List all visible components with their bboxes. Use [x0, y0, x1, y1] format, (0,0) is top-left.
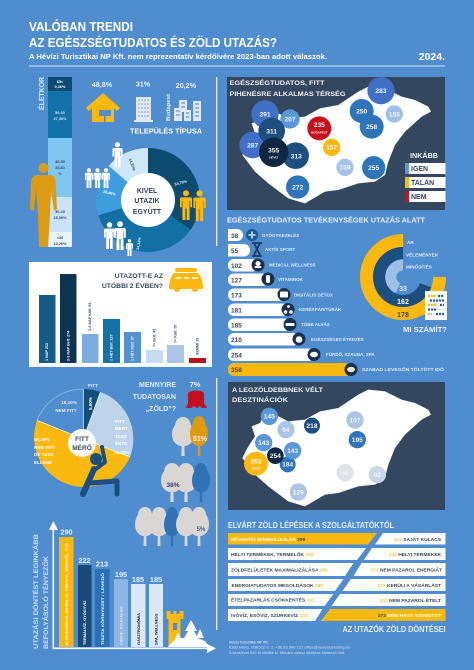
heading: ELVÁRT ZÖLD LÉPÉSEK A SZOLGÁLTATÓKTÓL	[228, 521, 394, 530]
map and bubbles: 283	[375, 88, 387, 95]
bars: 127	[231, 278, 242, 284]
bars: 185	[150, 575, 162, 584]
bars	[59, 528, 163, 647]
centre label: MÉRŐ	[72, 443, 92, 452]
map and bubbles: 143	[287, 448, 299, 455]
heading: TUDATOSAN	[133, 394, 176, 401]
age stacked bar: 15,00%	[54, 216, 67, 220]
bars	[228, 229, 351, 376]
labels: EGÉSZSÉGES ÉTKEZÉS	[311, 335, 364, 342]
heading	[230, 78, 346, 98]
heading: „ZÖLD”?	[146, 404, 176, 413]
icon: abacus	[425, 291, 447, 320]
percent labels	[92, 80, 197, 90]
map and bubbles: HÉVÍZ	[269, 154, 278, 159]
centre label	[121, 173, 175, 227]
bars: 290	[60, 528, 73, 536]
icon: van	[169, 268, 203, 292]
bars: 2-3 NAP Külf. 81	[88, 303, 92, 331]
labels: TÖBB ALVÁS	[301, 321, 330, 327]
labels: MEDICAL WELLNESS	[269, 262, 316, 268]
year: 2024.	[419, 51, 445, 63]
percent 7: 7%	[190, 380, 201, 389]
age stacked bar: 40-50	[55, 160, 65, 164]
bars: 173	[231, 292, 242, 300]
pie chart: fitness: 25,20%	[114, 450, 130, 455]
labels: DIGITÁLIS DETOX	[294, 292, 333, 298]
left rows: MŰANYAG MINIMALIZÁLÁS 309	[231, 536, 306, 543]
age stacked bar: 33,80	[55, 166, 65, 170]
radial chart: what matters: 33	[399, 286, 407, 293]
bars: 1 NAP 213	[45, 343, 49, 361]
heading	[102, 273, 163, 290]
donut chart: travel companions	[85, 142, 206, 256]
trees 5 percent	[135, 507, 209, 546]
pie chart: fitness: NEM FITT	[55, 408, 77, 413]
percent labels: 20,2%	[176, 81, 197, 90]
left rows: ZÖLDFELÜLETEK MAXIMALIZÁLÁSA 285	[231, 566, 328, 574]
age heading: ÉLETKOR	[37, 77, 46, 110]
left rows: IVÓVÍZ, ESŐVÍZ, SZÜRKEVÍZ 231	[231, 611, 308, 619]
map and bubbles: 250	[356, 108, 368, 115]
age stacked bar: <30	[57, 236, 63, 240]
panel: settlement type	[86, 80, 203, 136]
bars: 195	[115, 570, 127, 579]
icon: person alone	[112, 142, 122, 167]
map and bubbles: 258	[366, 124, 378, 131]
bars: 185	[231, 322, 242, 330]
pie chart: fitness	[34, 383, 133, 494]
bars: 55	[231, 248, 239, 255]
map and bubbles: 255	[368, 165, 380, 172]
radial chart: what matters: 162	[397, 299, 409, 306]
panel: travelled in last 2 years	[29, 262, 212, 367]
map and bubbles: 355	[268, 147, 280, 154]
left rows	[228, 533, 377, 621]
bars: SPA, WELLNESS	[154, 613, 158, 645]
percent labels: 48,8%	[92, 80, 113, 89]
heading: UTAZÁSI DÖNTÉST LEGINKÁBB	[31, 534, 40, 649]
Budapest label: Budapest	[166, 94, 172, 121]
right rows: 271 NEM PAZAROL ENERGIÁT	[370, 566, 442, 574]
map and bubbles: 291	[259, 111, 271, 118]
pie chart: fitness: 18,10%	[61, 400, 77, 405]
map and bubbles: 143	[258, 440, 270, 447]
bars: 1 HÉT Külf. 97	[130, 336, 134, 361]
map and bubbles: 129	[293, 489, 304, 496]
panel: how green	[133, 380, 210, 546]
footer: Hévízi Turisztikai NP Kft.	[229, 640, 268, 644]
title: AZ EGÉSZSÉGTUDATOS ÉS ZÖLD UTAZÁS?	[29, 35, 277, 50]
pie chart: fitness: ELLENE	[34, 460, 52, 465]
labels: GYÓGYKEZELÉS	[262, 231, 299, 238]
right rows: 332 NEM PAZAROL ÉTELT	[380, 596, 441, 604]
title: A Hévízi Turisztikai NP Kft. nem reprezentatív kérdőívére 2023-ban adott válaszok.	[29, 54, 327, 61]
age stacked bar: 30-40	[55, 210, 65, 214]
bars: GASZTRONÓMIA	[136, 613, 141, 645]
map and bubbles: 107	[349, 417, 361, 424]
heading: MENNYIRE	[139, 382, 176, 389]
title: VALÓBAN TRENDI	[29, 19, 133, 34]
left rows: HELYI TERMÉKEK, TERMELŐK 295	[231, 550, 314, 558]
bars: 181	[231, 308, 242, 314]
legend	[405, 151, 446, 202]
bars: 1 HÉT Belf. 127	[108, 334, 114, 361]
map and bubbles: 287	[247, 142, 259, 149]
bars: 254	[231, 352, 242, 360]
trees 51 percent: 51%	[193, 436, 208, 443]
labels: AKTÍV SPORT	[265, 245, 296, 252]
labels: KERÉKPÁR/TÚRÁK	[299, 305, 342, 312]
map and bubbles: 159	[339, 165, 351, 172]
right rows: 372 NEM HAGY SZEMETET	[378, 613, 441, 619]
map and bubbles: 184	[282, 462, 294, 469]
labels: FÜRDŐ, SZAUNA, SPA	[326, 351, 375, 357]
icon: tree stump	[186, 390, 207, 408]
bars: 7+ Belf. 43	[152, 329, 156, 347]
map and bubbles: 94	[282, 427, 290, 434]
axes	[49, 521, 216, 653]
bars: 185	[132, 575, 144, 584]
bars: CSEND, NYUGALOM	[118, 607, 124, 645]
heading: EGÉSZSÉGTUDATOS TEVÉKENYSÉGEK UTAZÁS ALATT	[227, 216, 426, 224]
map and bubbles: 36	[341, 470, 349, 477]
map and bubbles: 235	[314, 122, 325, 129]
right rows: 273 KERÜLI A VÁSÁRLÁST	[377, 582, 441, 589]
radial chart: what matters: ÁR	[407, 239, 414, 245]
bars: 7+ Külf. 57	[174, 324, 178, 343]
icon: group of friends	[85, 168, 110, 188]
pie chart: fitness: FITT	[88, 383, 98, 389]
left rows: ÉTELPAZARLÁS CSÖKKENTÉS 261	[231, 596, 315, 604]
pie chart: fitness: 50,28%	[34, 437, 50, 442]
map and bubbles	[239, 77, 431, 203]
radial chart: what matters	[366, 239, 447, 334]
map and bubbles: 145	[264, 414, 275, 421]
caption: AZ UTAZÓK ZÖLD DÖNTÉSEI	[342, 625, 446, 634]
labels: SZABAD LEVEGŐN TÖLTÖTT IDŐ	[362, 366, 445, 372]
radial chart: what matters: 178	[397, 312, 409, 319]
right rows: 324 SAJÁT KULACS	[394, 536, 442, 543]
bars: TISZTA KÖRNYEZET / LEVEGŐ	[100, 573, 105, 645]
heading: TELEPÜLÉS TÍPUSA	[130, 126, 203, 136]
donut chart: travel companions: 14,20%	[128, 158, 136, 172]
heading	[232, 385, 324, 404]
heading: EGÉSZSÉGTUDATOS, FITT	[230, 78, 325, 87]
map and bubbles: HÉVÍZ	[252, 466, 261, 471]
icon: house	[86, 93, 120, 122]
donut chart: travel companions: 16,46%	[103, 189, 117, 197]
pie chart: fitness: TESZ	[115, 434, 127, 439]
map and bubbles: 311	[266, 128, 277, 135]
pie chart: fitness: NEM FITT	[34, 445, 55, 450]
bars: 38	[231, 233, 239, 240]
heading: A LEGZÖLDEBBNEK VÉLT	[232, 385, 324, 394]
bars: TERMÁLVÍZ, GYÓGYVÍZ	[82, 600, 87, 645]
icon: town building	[134, 97, 153, 122]
icon: family	[104, 221, 133, 256]
centre label: EGYÜTT	[133, 207, 162, 216]
map and bubbles: 262	[250, 458, 262, 465]
centre label: FITT	[75, 436, 89, 443]
right rows: 235 HELYI TERMÉKEK	[389, 550, 441, 558]
caption: MI SZÁMÍT?	[403, 325, 447, 334]
icon: man silhouette	[30, 163, 57, 247]
donut chart: travel companions: 34,78%	[174, 179, 188, 187]
title	[29, 19, 327, 61]
panel: activities	[227, 216, 445, 376]
icon: exercising figure	[83, 447, 117, 494]
bars: 210	[231, 337, 242, 344]
age stacked bar: 27,50%	[54, 117, 67, 121]
centre label: KIVEL	[137, 188, 158, 195]
heading: UTÓBBI 2 ÉVBEN?	[102, 281, 163, 290]
labels	[262, 231, 445, 372]
labels: VITAMINOK	[278, 277, 304, 282]
age stacked bar: 10,20%	[54, 242, 67, 246]
bars: SEMMI 13	[196, 338, 200, 355]
bars: 102	[231, 263, 242, 270]
heading: UTAZOTT-E AZ	[115, 273, 163, 280]
map and bubbles: 157	[326, 145, 338, 152]
heading: BEFOLYÁSOLÓ TÉNYEZŐK	[41, 556, 50, 649]
heading: DESZTINÁCIÓK	[232, 395, 288, 404]
footer	[229, 640, 350, 655]
age stacked bar: 0,36%	[55, 85, 66, 89]
panel: expected green steps	[228, 521, 446, 634]
donut chart: travel companions: 34,33%	[136, 237, 142, 251]
legend: NEM	[411, 194, 427, 201]
centre label	[68, 429, 96, 457]
map and bubbles	[242, 390, 431, 506]
map and bubbles: 155	[389, 111, 400, 118]
bars: 2-3 NAP Belf. 274	[66, 330, 70, 361]
pie chart: fitness: 5,60%	[88, 397, 93, 410]
heading: PIHENÉSRE ALKALMAS TÉRSÉG	[230, 89, 346, 98]
trees 38 percent: 38%	[166, 482, 180, 489]
bars: 358	[231, 367, 242, 374]
pie chart: fitness: ÉRTE	[115, 439, 127, 446]
map and bubbles: BUDAPEST	[311, 130, 328, 134]
map and bubbles: 92	[374, 472, 381, 479]
map and bubbles: 313	[291, 153, 302, 160]
left rows: ENERGIATUDATOS MEGOLDÁSOK 285	[232, 582, 323, 589]
icon: castle tower and trees	[166, 611, 208, 647]
right rows	[321, 533, 446, 621]
radial chart: what matters: VÉLEMÉNYEK	[406, 250, 439, 258]
panel: age	[30, 77, 72, 247]
bars: 213	[96, 560, 108, 568]
panel: greenest destinations map	[228, 382, 445, 510]
percent labels: 31%	[136, 80, 151, 88]
age stacked bar	[48, 77, 72, 247]
age stacked bar: %	[58, 172, 62, 176]
bars	[39, 274, 206, 363]
panel: healthy region map	[227, 77, 446, 210]
pie chart: fitness: FITT	[115, 419, 125, 424]
bars: KIRÁNDULÓHELY, HEGY, ERDŐ, TÓ	[64, 543, 69, 645]
map and bubbles: 195	[352, 437, 363, 444]
pie chart: fitness: MERT	[115, 426, 128, 431]
centre label: UTAZIK	[134, 198, 160, 205]
icon: couple	[180, 190, 206, 221]
age stacked bar: 50-60	[55, 111, 65, 115]
footer: 8380 Hévíz, Rákóczi u. 2. +36 83 540 131 office@hevizmarketing.hu	[229, 646, 350, 650]
map and bubbles: 254	[270, 453, 281, 460]
icons	[246, 229, 358, 376]
footer: A kérdőívet 920 fő töltötte ki. Minden válasz kitöltése kötelező volt.	[229, 651, 345, 655]
trees 38 percent	[161, 463, 210, 502]
bars: 222	[78, 556, 91, 565]
legend: INKÁBB	[410, 151, 438, 160]
map and bubbles: 207	[284, 116, 296, 123]
trees 51 percent	[172, 416, 208, 456]
trees 5 percent: 5%	[197, 527, 206, 533]
heading	[133, 382, 176, 413]
radial chart: what matters: MINŐSÍTÉS	[406, 262, 432, 270]
heading	[31, 534, 50, 649]
icon: city	[174, 100, 201, 121]
pie chart: fitness: DE TESZ	[34, 452, 54, 457]
legend: IGEN	[411, 166, 428, 173]
panel: decision factors	[31, 521, 216, 653]
map and bubbles: 272	[292, 184, 304, 191]
legend: TALÁN	[411, 178, 434, 187]
age stacked bar: 65<	[57, 80, 64, 84]
map and bubbles: 218	[306, 423, 318, 430]
